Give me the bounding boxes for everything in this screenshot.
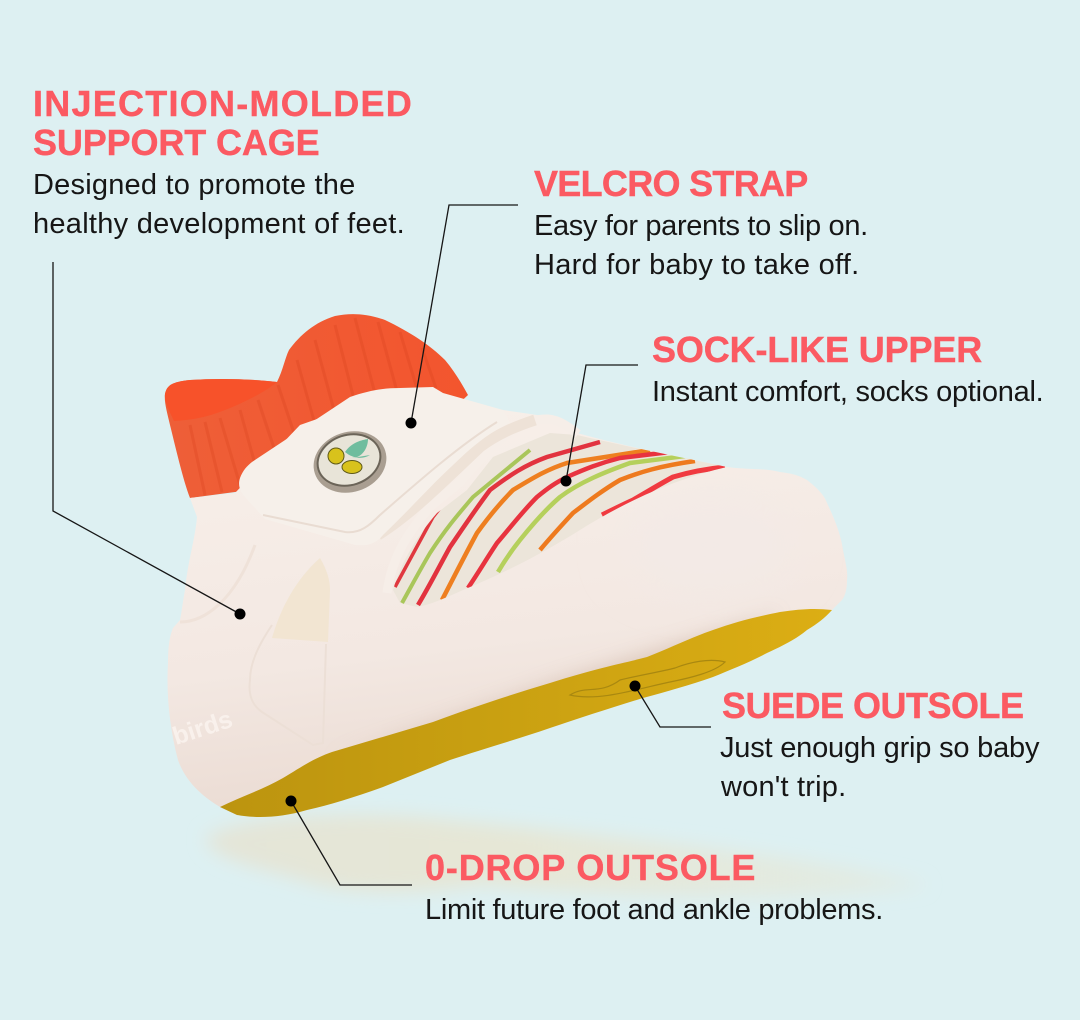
white rim around mesh	[387, 419, 578, 593]
description: won't trip.	[721, 771, 846, 803]
shoe illustration and callout lines	[52, 204, 890, 898]
callout: drop line	[286, 796, 412, 885]
sock heel collar edge	[180, 545, 255, 622]
callout: suede line	[630, 680, 711, 727]
cage seam	[250, 625, 326, 745]
description	[720, 732, 1040, 803]
ground shadow	[205, 815, 930, 897]
description: Hard for baby to take off.	[534, 249, 859, 281]
text block: sock-like upper	[652, 329, 1043, 408]
heading: SOCK-LIKE UPPER	[652, 329, 982, 370]
text block: 0-drop outsole	[425, 847, 883, 926]
heading: INJECTION-MOLDED	[33, 83, 413, 124]
heading: VELCRO STRAP	[534, 163, 808, 204]
description: Instant comfort, socks optional.	[652, 376, 1043, 408]
description	[33, 169, 405, 240]
outsole logo emboss	[570, 660, 725, 697]
sock cuff	[165, 314, 468, 498]
text block: support cage	[33, 83, 413, 240]
description: Designed to promote the	[33, 169, 355, 201]
body shading	[392, 615, 759, 734]
velcro fabric strip	[378, 420, 535, 535]
heading: SUEDE OUTSOLE	[722, 685, 1024, 726]
lemon button	[306, 422, 394, 502]
description	[534, 210, 868, 281]
velcro strap	[239, 387, 510, 545]
embossed brand: birds	[169, 705, 236, 751]
striped knit mesh	[393, 433, 726, 607]
cuff inside opening	[165, 379, 277, 421]
text block: velcro strap	[534, 163, 868, 281]
suede outsole	[220, 609, 832, 817]
strap inner lip	[263, 422, 497, 532]
shoe upper	[167, 390, 847, 815]
heading	[33, 83, 413, 163]
description: Limit future foot and ankle problems.	[425, 894, 883, 926]
callout: upper line	[560, 365, 638, 486]
heading: SUPPORT CAGE	[33, 122, 319, 163]
description: healthy development of feet.	[33, 208, 405, 240]
description: Easy for parents to slip on.	[534, 210, 868, 242]
description: Just enough grip so baby	[720, 732, 1039, 764]
callout: velcro line	[406, 205, 518, 428]
heading: 0-DROP OUTSOLE	[425, 847, 756, 888]
side window	[272, 558, 330, 642]
text block: suede outsole	[720, 685, 1040, 803]
callout: support cage line	[53, 262, 246, 620]
